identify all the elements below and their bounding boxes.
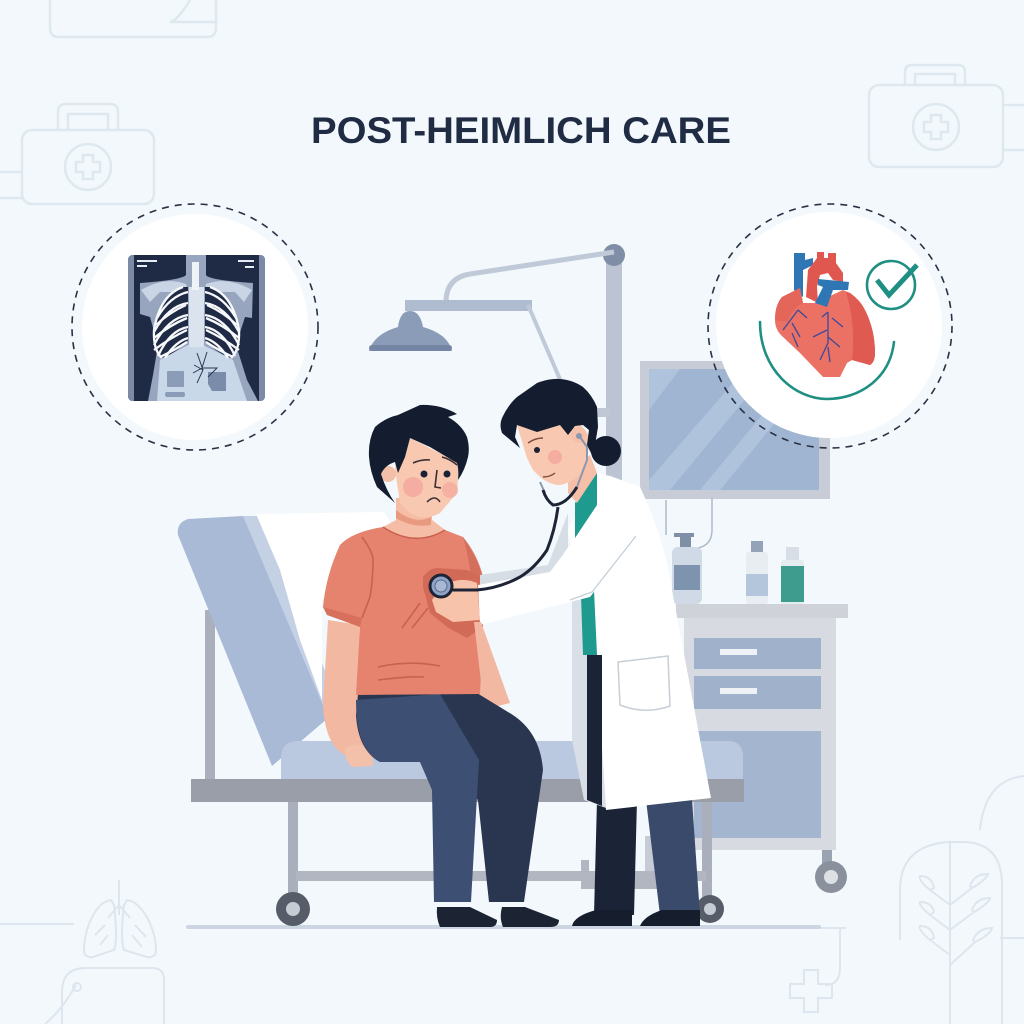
floor line [186,925,821,929]
doctor hand [432,580,480,622]
coat pocket [618,656,670,710]
patient hair [369,405,469,503]
doctor coat [568,473,711,810]
callout: heart [708,204,952,448]
medical cart [645,604,848,893]
doctor face [517,410,590,485]
patient right arm [468,620,510,710]
patient shoes [437,907,497,927]
patient neck [383,498,445,538]
title: POST-HEIMLICH CARE [311,110,731,151]
background icon: first aid kit left [0,104,154,204]
check badge [867,261,917,309]
patient [323,405,559,927]
monitor [640,361,830,548]
doctor trousers [594,800,637,915]
rib cage left and right [154,287,188,358]
doctor scrubs [575,473,597,655]
background icon: tree and cross bottom right [790,776,1024,1024]
examination lamp [369,244,625,715]
stethoscope [430,433,587,597]
doctor arm [478,476,647,625]
patient trousers [356,690,543,902]
x-ray film [128,255,265,401]
callout: chest x-ray [72,204,318,450]
doctor hair [500,379,598,457]
doctor neck [568,455,597,503]
arc under heart [760,322,894,399]
doctor shoes [572,910,632,926]
heart [775,252,875,377]
bottles on cart [672,533,804,604]
background icon: first aid kit top left edge [50,0,216,37]
patient shirt [323,527,483,695]
background icon: lungs bottom left [0,880,164,1024]
background icon: first aid kit right [869,65,1024,167]
doctor [430,379,711,926]
patient face [395,438,459,517]
examination bed [178,512,744,926]
patient left arm [323,620,368,755]
